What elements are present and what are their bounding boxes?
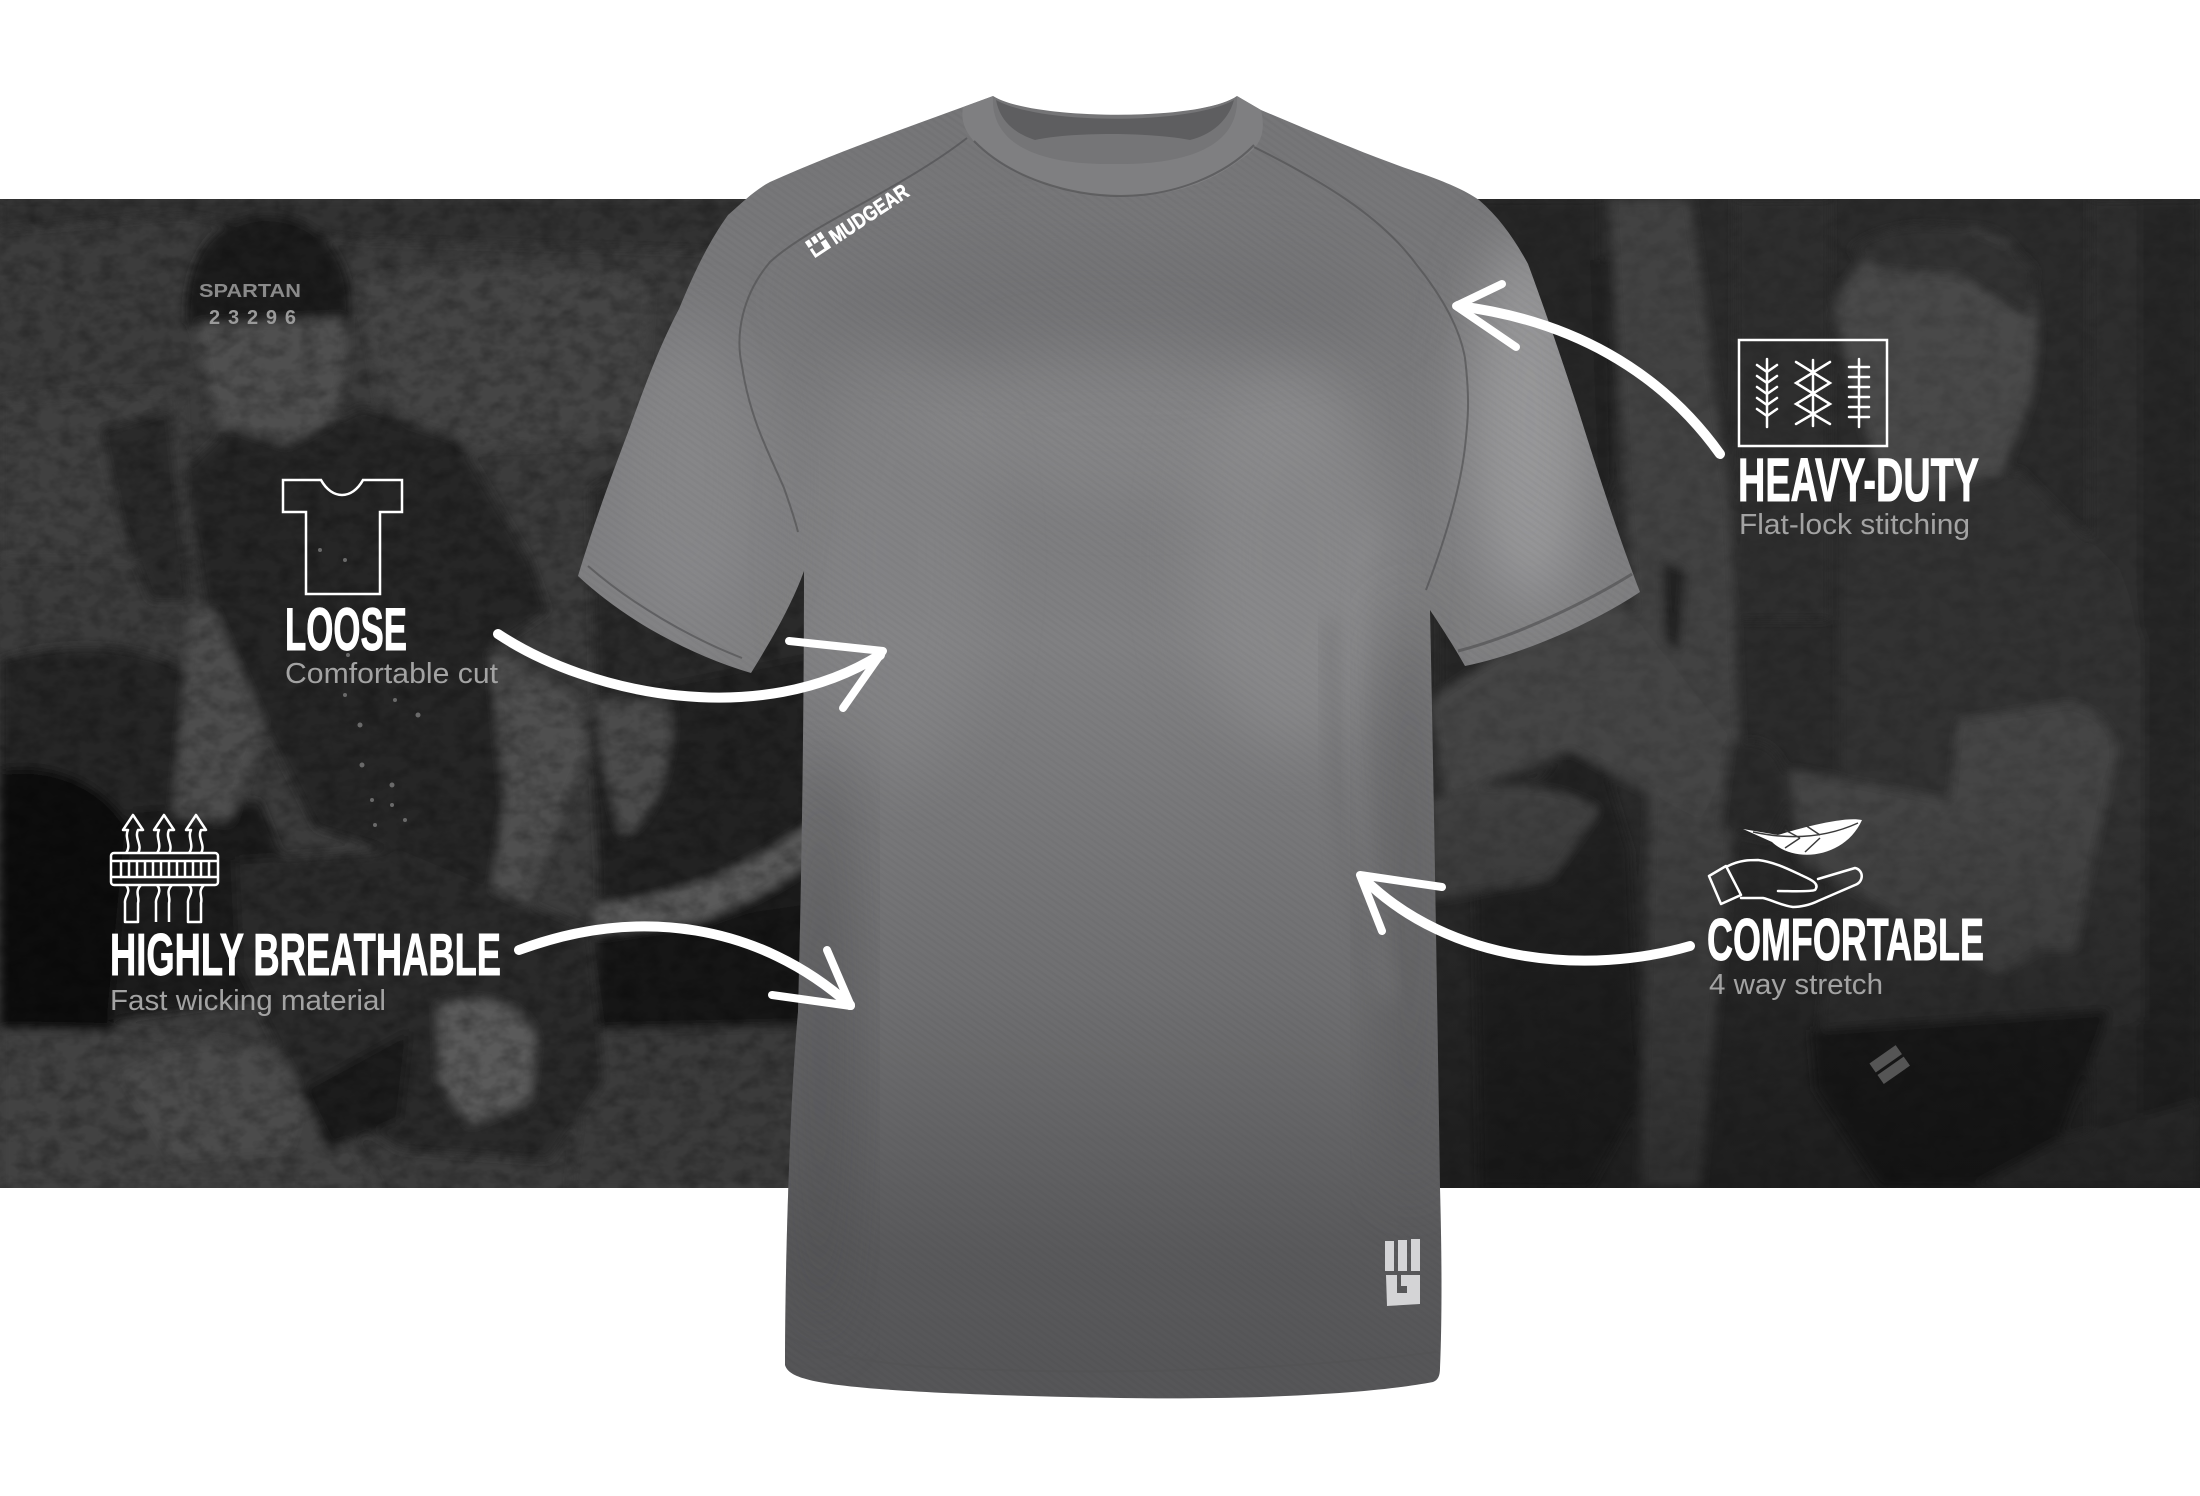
icon: t-shirt outline bbox=[283, 480, 402, 594]
t-shirt bbox=[560, 90, 1650, 1410]
logo on shorts in photo bbox=[1869, 1045, 1910, 1084]
shirt chest logo bbox=[805, 179, 913, 262]
callout: Comfortable bbox=[1707, 819, 1984, 1001]
left background photo: mud runner bbox=[0, 199, 840, 1188]
arrow: Heavy-Duty to shirt bbox=[1456, 284, 1720, 454]
heading: Highly Breathable: HIGHLY BREATHABLE bbox=[110, 922, 501, 988]
arrow: Breathable to shirt bbox=[519, 926, 851, 1006]
icon: breathable fabric bbox=[111, 815, 218, 922]
subtext: Fast wicking material: Fast wicking material bbox=[110, 985, 386, 1017]
callout: Loose bbox=[283, 480, 498, 690]
arrow: Comfortable to shirt bbox=[1360, 875, 1690, 961]
heading: Loose: LOOSE bbox=[285, 596, 407, 663]
callout: Heavy-Duty bbox=[1738, 340, 1979, 541]
bib text on headband bbox=[200, 284, 300, 324]
shirt chest logo: MUDGEAR bbox=[825, 180, 913, 249]
callout: Highly Breathable bbox=[110, 815, 501, 1017]
shading bbox=[997, 388, 1206, 443]
bib text on headband: 23296 bbox=[209, 307, 296, 329]
body bbox=[186, 215, 350, 330]
heading: Heavy-Duty: HEAVY-DUTY bbox=[1738, 446, 1979, 514]
right background photo: rope climber bbox=[1400, 199, 2200, 1188]
arrow: Loose to shirt bbox=[498, 634, 883, 708]
seams bbox=[588, 138, 1633, 659]
heading: Comfortable: COMFORTABLE bbox=[1707, 907, 1984, 973]
icon: stitching box bbox=[1739, 340, 1887, 446]
shirt hem logo bbox=[1385, 1239, 1420, 1306]
subtext: Comfortable cut: Comfortable cut bbox=[285, 658, 498, 690]
icon: feather over hand bbox=[1709, 819, 1862, 907]
collar band bbox=[962, 96, 1263, 196]
bib text on headband: SPARTAN bbox=[199, 281, 301, 301]
subtext: 4 way stretch: 4 way stretch bbox=[1709, 969, 1883, 1001]
subtext: Flat-lock stitching: Flat-lock stitching bbox=[1739, 509, 1970, 541]
water drops on runner's shirt bbox=[318, 548, 420, 827]
neck interior bbox=[993, 96, 1237, 107]
